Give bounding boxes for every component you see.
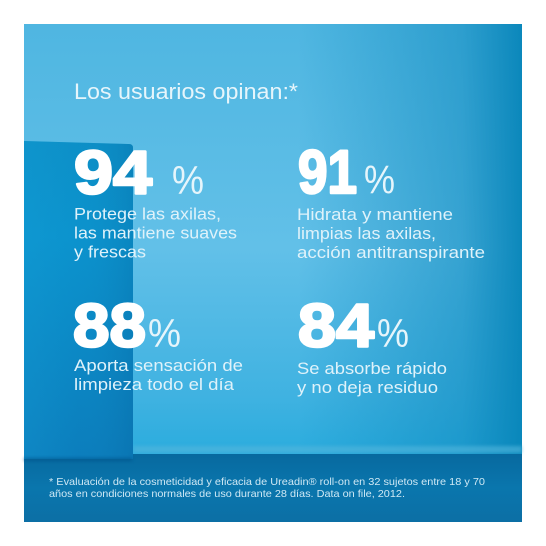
stat: 84% (297, 292, 447, 397)
stat: 94%: y frescas (74, 244, 146, 262)
stat: 88% (73, 292, 243, 394)
stat: 88%: limpieza todo el día (74, 376, 235, 394)
stat: 88%: Aporta sensación de (74, 357, 243, 375)
stat: 91% (297, 138, 485, 262)
stat: 91%: limpias las axilas, (297, 225, 436, 243)
footnote: * Evaluación de la cosmeticidad y eficacia de Ureadin® roll-on en 32 sujetos entre 18 y 70 (49, 476, 485, 488)
stat: 84%: % (377, 312, 409, 356)
footnote: años en condiciones normales de uso durante 28 días. Data on file, 2012. (49, 488, 405, 500)
stat: 94%: las mantiene suaves (74, 224, 237, 242)
floor band (24, 446, 522, 522)
stat: 94% (74, 138, 237, 262)
stat: 84%: Se absorbe rápido (297, 360, 447, 378)
stat: 84%: 84 (298, 292, 374, 360)
stat: 91%: Hidrata y mantiene (297, 206, 453, 224)
stat: 88%: % (148, 312, 181, 356)
stat: 94%: % (172, 159, 204, 203)
stat: 91%: 91 (298, 138, 357, 206)
footnote (49, 476, 485, 500)
stat: 91%: acción antitranspirante (297, 244, 485, 262)
stat: 94%: 94 (74, 138, 152, 206)
stat: 94%: Protege las axilas, (74, 206, 221, 224)
stat: 84%: y no deja residuo (297, 379, 438, 397)
stat: 91%: % (364, 158, 395, 202)
title: Los usuarios opinan:* (74, 79, 298, 104)
stat: 88%: 88 (73, 292, 146, 360)
product box silhouette (24, 141, 133, 461)
